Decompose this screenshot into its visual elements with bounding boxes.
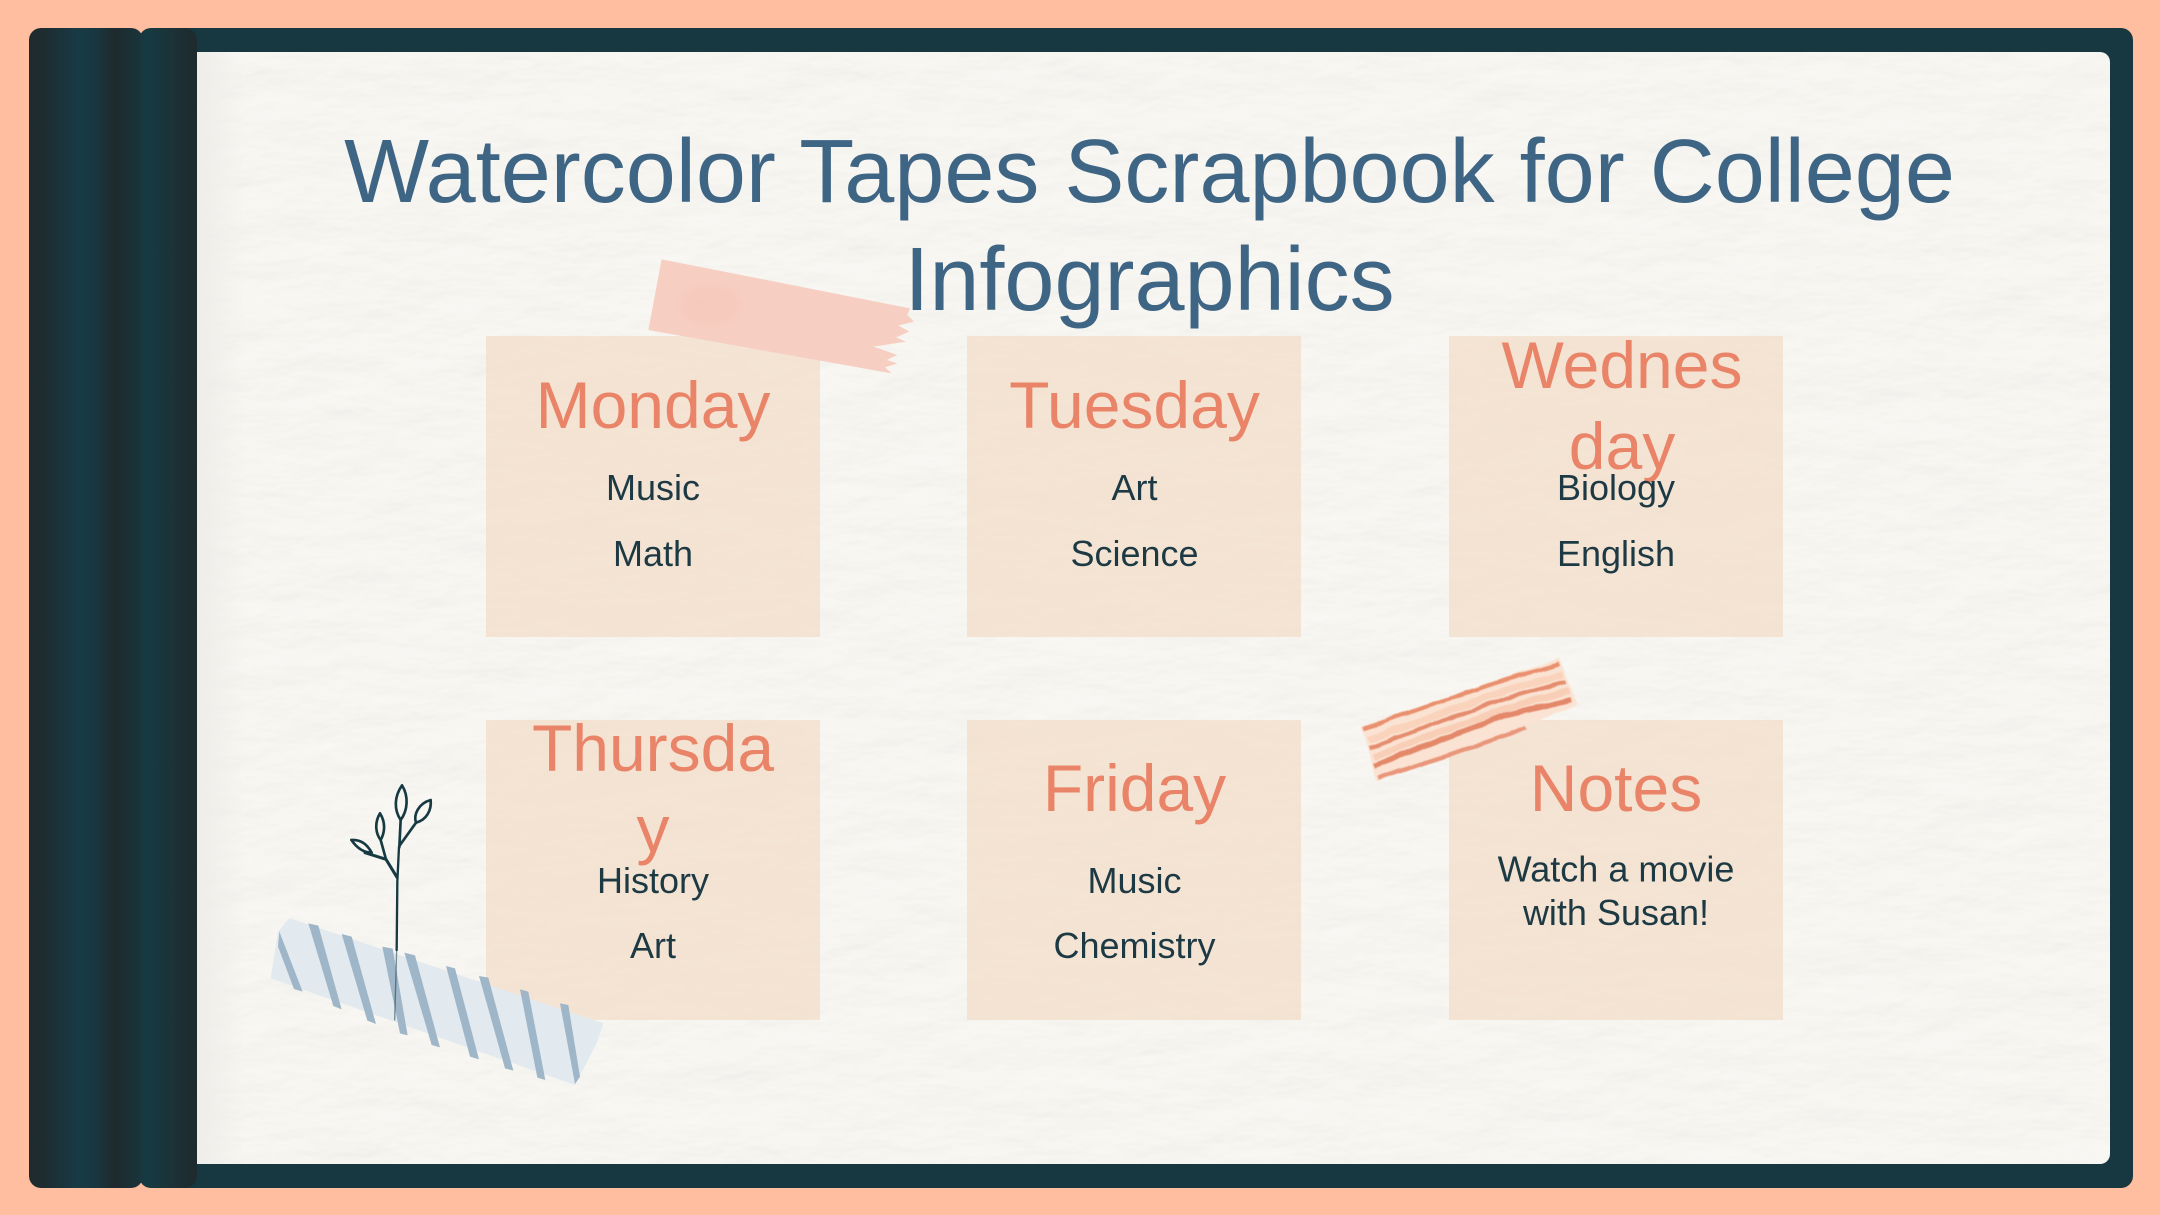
panel: Monday (486, 336, 820, 637)
panel: Wednesday: Wednes (1502, 328, 1742, 402)
panel: Notes: with Susan! (1522, 892, 1709, 933)
panel: Notes: Notes (1530, 751, 1702, 825)
icon: plant sprig (351, 785, 431, 1020)
blue striped washi tape (271, 918, 603, 1085)
book spine (29, 28, 197, 1188)
panel: Friday: Music (1087, 860, 1182, 901)
panel: Wednesday: English (1557, 533, 1675, 574)
panel: Monday: Math (613, 533, 693, 574)
panel: Friday: Chemistry (1053, 925, 1216, 966)
title (344, 122, 1955, 330)
panel: Thursday: Art (630, 925, 676, 966)
title: Watercolor Tapes Scrapbook for College (344, 122, 1955, 222)
pink washi tape (648, 259, 914, 373)
panel: Tuesday (967, 336, 1301, 637)
panel: Thursday: History (597, 860, 709, 901)
panel: Wednesday: day (1569, 409, 1675, 483)
orange striped watercolor tape (1362, 658, 1578, 782)
panel: Monday: Music (606, 467, 700, 508)
panel: Wednesday (1449, 328, 1783, 637)
title: Infographics (904, 230, 1395, 330)
panel: Tuesday: Art (1111, 467, 1158, 508)
panel: Tuesday: Tuesday (1009, 368, 1260, 442)
panel: Friday (967, 720, 1301, 1020)
panel: Thursday (486, 711, 820, 1020)
panel: Monday: Monday (536, 368, 770, 442)
panel: Thursday: Thursda (532, 711, 774, 785)
panel: Friday: Friday (1043, 751, 1226, 825)
panel: Notes (1449, 720, 1783, 1020)
panel: Wednesday: Biology (1557, 467, 1675, 508)
panel: Notes: Watch a movie (1498, 848, 1734, 890)
panel: Thursday: y (636, 792, 670, 866)
panel: Tuesday: Science (1070, 533, 1199, 574)
